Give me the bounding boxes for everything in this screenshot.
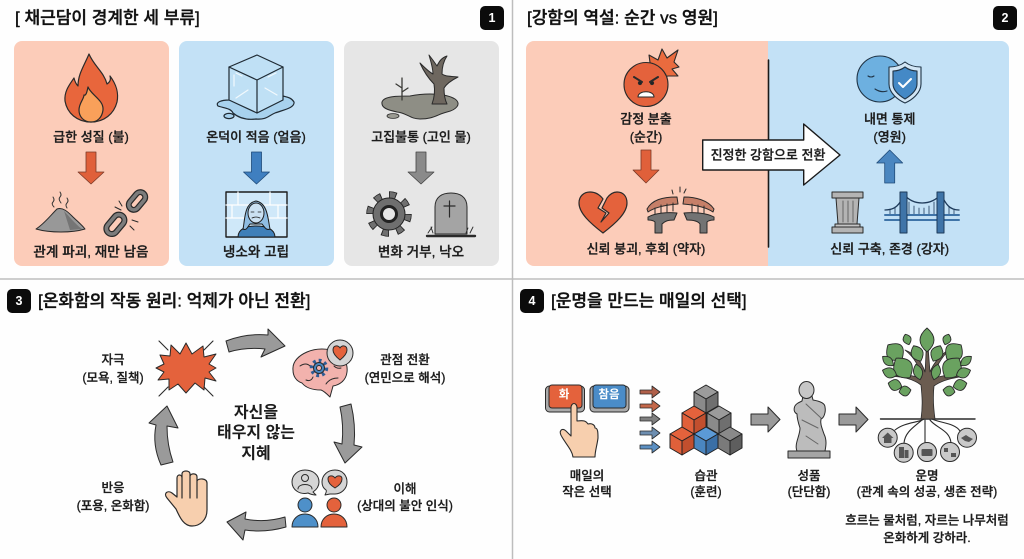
arrow: habit to character — [751, 407, 780, 432]
label: perspective shift: 관점 전환 — [380, 353, 430, 367]
arrows: small choice arrows — [640, 386, 660, 453]
card: fire — [14, 41, 169, 266]
label: stimulus: 자극 — [101, 353, 125, 367]
heading 4: [운명을 만드는 매일의 선택] — [551, 292, 747, 310]
icon: isolated person in ice wall — [226, 192, 287, 237]
label: destiny — [857, 469, 997, 499]
icon: statue — [788, 382, 830, 458]
label: little warmth: 온덕이 적음 (얼음) — [206, 130, 306, 144]
label: stubbornness: 고집불통 (고인 물) — [371, 130, 471, 144]
icon: two buttons and hand: 화 — [559, 387, 570, 401]
label: character: 성품 — [797, 469, 821, 483]
panel 4: daily choices — [520, 289, 1009, 545]
center text: wisdom — [217, 404, 295, 462]
arrow: character to destiny — [839, 407, 868, 432]
icon: two people with speech bubbles — [292, 470, 347, 527]
closing message: 온화하게 강하라. — [883, 531, 971, 545]
badge 1: 1 — [489, 11, 496, 25]
icon: ash pile — [36, 192, 85, 232]
label: cold and isolated: 냉소와 고립 — [223, 244, 289, 260]
icon: two buttons and hand: 참음 — [598, 387, 620, 401]
label: inner control: 내면 통제 — [864, 112, 915, 126]
label: character — [788, 469, 830, 499]
icon: two buttons and hand — [546, 385, 629, 457]
heading 1: [ 채근담이 경계한 세 부류] — [15, 8, 200, 28]
icon: broken heart — [579, 192, 627, 233]
label: broken trust: 신뢰 붕괴, 후회 (약자) — [587, 242, 705, 256]
label: destiny: (관계 속의 성공, 생존 전략) — [857, 485, 997, 499]
label: moment: (순간) — [630, 130, 662, 144]
badge 4: 4 — [529, 294, 536, 308]
label: transition: 진정한 강함으로 전환 — [711, 148, 825, 162]
label: destiny: 운명 — [915, 469, 939, 483]
label: daily small choice: 매일의 — [570, 468, 604, 483]
center text: wisdom: 자신을 — [234, 404, 278, 422]
badge 4 — [520, 289, 544, 313]
badge 3 — [7, 289, 31, 313]
label: refusal of change: 변화 거부, 낙오 — [378, 244, 464, 260]
label: stimulus detail: (모욕, 질책) — [82, 370, 144, 385]
heading 3: [온화함의 작동 원리: 억제가 아닌 전환] — [38, 292, 310, 310]
arrow: down gray — [408, 152, 434, 184]
arrow: transition to true strength — [703, 124, 840, 185]
icon: broken bridge — [647, 187, 714, 233]
center text: wisdom: 지혜 — [241, 444, 271, 462]
icon: tree with roots — [878, 328, 976, 462]
label: ruined relations: 관계 파괴, 재만 남음 — [33, 244, 149, 260]
closing message — [845, 514, 1009, 545]
divider line — [768, 60, 770, 247]
icon: angry face — [624, 49, 679, 106]
icon: calm face and shield — [857, 56, 921, 103]
icon: flame — [65, 54, 118, 122]
label: response detail: (포용, 온화함) — [77, 498, 149, 513]
heading 2: [강함의 역설: 순간 vs 영원] — [527, 8, 718, 28]
icon: rusty gear — [370, 195, 408, 233]
panel 2: paradox of strength — [526, 6, 1017, 266]
card: ice — [179, 41, 334, 266]
panel 3: working principle — [7, 289, 453, 540]
icon: open palm hand — [166, 471, 207, 526]
arrow: response to stimulus — [149, 406, 178, 465]
arrow: down red — [633, 150, 659, 183]
label: eternity: (영원) — [873, 130, 906, 144]
closing message: 흐르는 물처럼, 자르는 나무처럼 — [845, 514, 1009, 528]
badge 3: 3 — [16, 294, 23, 308]
badge 2 — [993, 6, 1017, 30]
label: daily small choice — [562, 468, 612, 499]
label: understanding: 이해 — [393, 482, 417, 496]
left half: moment — [526, 41, 768, 266]
icon: ice cube — [217, 55, 294, 119]
label: habit — [690, 469, 722, 499]
panel 1: three types — [14, 6, 504, 266]
right half: eternity — [768, 41, 1009, 266]
label: character: (단단함) — [788, 484, 830, 499]
icon: gravestone — [427, 193, 475, 236]
icon: stimulus burst — [156, 341, 216, 396]
arrow: down blue — [244, 152, 270, 184]
arrow: stimulus to perspective — [226, 329, 285, 357]
label: trust building: 신뢰 구축, 존경 (강자) — [830, 242, 949, 256]
icon: broken chain — [104, 190, 147, 236]
arrow: perspective to understanding — [334, 404, 362, 463]
center text: wisdom: 태우지 않는 — [217, 424, 295, 442]
badge 1 — [480, 6, 504, 30]
label: response: 반응 — [101, 481, 125, 495]
card: stagnant water — [344, 41, 499, 266]
label: daily small choice: 작은 선택 — [562, 485, 612, 499]
label: understanding detail: (상대의 불안 인식) — [357, 499, 453, 513]
label: perspective detail: (연민으로 해석) — [365, 371, 445, 385]
icon: suspension bridge — [885, 192, 959, 233]
icon: brain with heart and gear — [293, 340, 353, 397]
icon: swamp and dead tree — [382, 55, 458, 119]
arrow: up blue — [877, 150, 903, 183]
label: habit: 습관 — [694, 469, 718, 483]
icon: pillar — [832, 192, 863, 233]
label: habit: (훈련) — [690, 484, 722, 499]
label: emotional outburst: 감정 분출 — [620, 112, 672, 126]
label: hasty temper: 급한 성질 (불) — [53, 130, 129, 144]
badge 2: 2 — [1002, 11, 1009, 25]
arrow: understanding to response — [227, 512, 286, 540]
arrow: down red — [78, 152, 104, 184]
icon: habit cubes — [670, 385, 742, 455]
